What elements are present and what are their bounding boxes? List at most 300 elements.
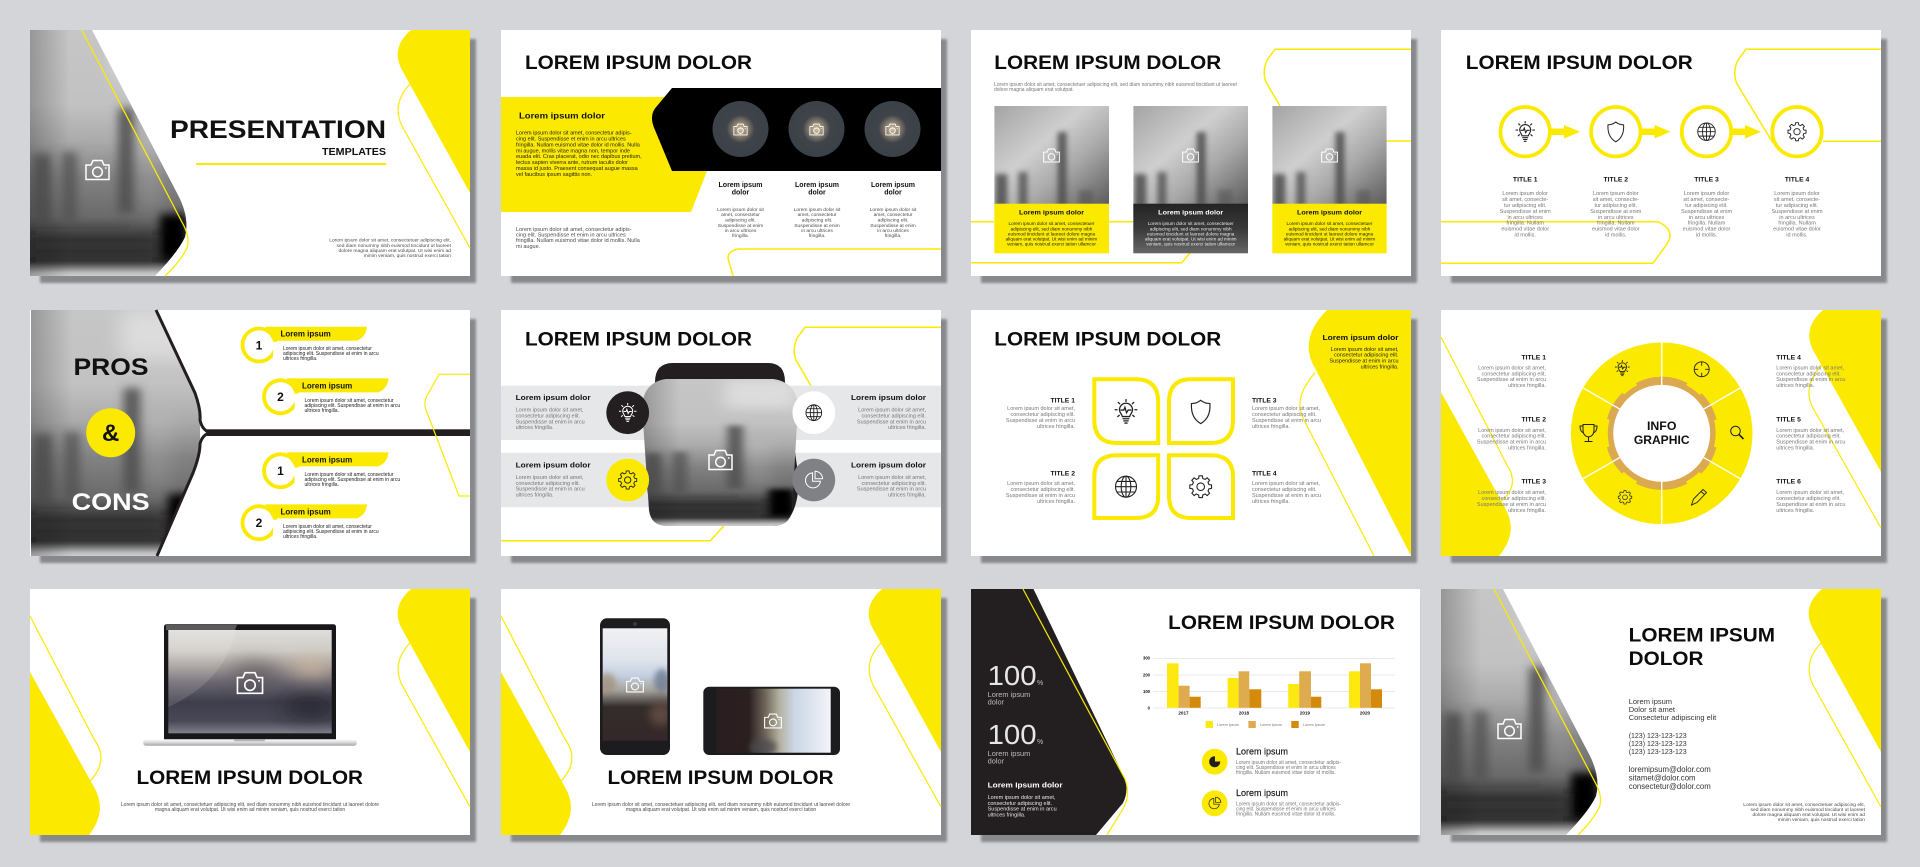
column 1: dolor <box>732 190 750 197</box>
yellow outline right <box>425 374 470 496</box>
column 3: Suspendisse at enim <box>870 223 916 229</box>
item 1 text: fringilla. Nullam euismod vitae dolor id mollis. <box>1236 770 1336 776</box>
item 1 text <box>1236 746 1341 776</box>
camera icons <box>734 124 899 135</box>
left text 2: ultrices fringilla. <box>516 492 554 498</box>
body text: dolore magna aliquam erat volutpat. Ut wisi enim ad <box>1752 812 1865 818</box>
panel: slide 1 presentation cover <box>30 30 470 276</box>
yellow accent line <box>728 249 941 276</box>
icon: camera <box>86 160 109 180</box>
stat 2 <box>988 719 1043 766</box>
left text 2: Lorem ipsum dolor sit amet, <box>516 475 584 481</box>
yellow block text: cing elit. Suspendisse et enim in arcu ultrices <box>516 136 626 142</box>
title 3 text: ultrices fringilla. <box>1252 424 1290 430</box>
item 2 icon <box>1202 790 1228 816</box>
yellow block text: Lorem ipsum dolor sit amet, consectetur adipis- <box>516 130 632 136</box>
step 4 text: euismod vitae dolor <box>1773 227 1821 233</box>
column 3: amet, consectetur <box>874 212 913 218</box>
panel: slide 5 pros and cons <box>30 310 470 556</box>
step 2 text: Suspendisse at enim <box>1590 209 1642 215</box>
panel: slide 6 central photo <box>501 310 941 556</box>
arrows <box>1549 125 1761 138</box>
icon: camera <box>627 678 643 692</box>
address: Dolor sit amet <box>1629 705 1676 714</box>
yellow line left <box>971 221 1133 223</box>
body text: sed diam nonummy nibh euismod tincidunt ut laoreet <box>337 243 452 249</box>
card 3: aliquam erat volutpat. Ut wisi enim ad minim <box>1284 237 1375 242</box>
step 1 text: tur adipiscing elit. <box>1504 203 1547 209</box>
card 3: euismod tincidunt ut laoreet dolore magna <box>1286 232 1374 237</box>
item 1 text: Lorem ipsum dolor sit amet, consectetur adipis- <box>1236 760 1341 766</box>
left text 3: ultrices fringilla. <box>1508 508 1546 514</box>
step 3 text: fringilla. Nullam <box>1688 221 1726 227</box>
left text 1: consectetur adipiscing elit. <box>1481 372 1546 378</box>
step 3 text: Suspendisse at enim <box>1681 209 1732 215</box>
wheel label <box>1634 421 1690 447</box>
left text 1: consectetur adipiscing elit. <box>516 414 581 420</box>
step 2 text: in arcu ultrices <box>1598 215 1634 221</box>
yellow line top <box>1264 49 1411 106</box>
bar chart: 0 <box>1148 705 1151 710</box>
icon: target <box>1694 362 1709 377</box>
left text 1: ultrices fringilla. <box>516 425 554 431</box>
pro item 2: ultrices fringilla. <box>304 408 339 414</box>
card 2: aliquam erat volutpat. Ut wisi enim ad minim <box>1145 237 1237 242</box>
column 2: in arcu ultrices <box>801 228 833 234</box>
divider <box>156 310 210 556</box>
legend: Lorem ipsum <box>1217 723 1239 727</box>
right text 2: Suspendisse at enim in arcu <box>857 486 926 492</box>
left text 1: Lorem ipsum dolor <box>516 393 591 402</box>
column 3: Lorem ipsum dolor sit <box>870 207 917 213</box>
right text 6: consectetur adipiscing elit. <box>1776 496 1841 502</box>
heading: LOREM IPSUM <box>1629 625 1775 647</box>
right text 6 <box>1776 479 1845 514</box>
step 2 text: tur adipiscing elit. <box>1595 203 1638 209</box>
yellow corner right <box>869 589 941 752</box>
photo placeholder <box>30 30 190 276</box>
left text 1: Lorem ipsum dolor sit amet, <box>1478 366 1546 372</box>
thin yellow curve right <box>1809 642 1881 807</box>
step 3 text: euismod vitae dolor <box>1683 227 1731 233</box>
right text 1 <box>851 393 926 431</box>
icon: globe <box>1116 476 1136 497</box>
left text 1: Lorem ipsum dolor sit amet, <box>516 408 584 414</box>
card 2: euismod tincidunt ut laoreet dolore magna <box>1147 232 1235 237</box>
pro item 1: Lorem ipsum dolor sit amet, consectetur <box>283 346 372 352</box>
icon: gear <box>1618 491 1632 504</box>
heading: DOLOR <box>1629 648 1703 670</box>
thin yellow line <box>1300 373 1374 556</box>
ampersand badge: & <box>102 420 119 447</box>
left text 1 <box>516 393 591 431</box>
left text 1: Suspendisse at enim in arcu <box>516 420 585 426</box>
stat 1: % <box>1037 680 1043 687</box>
yellow line lower <box>1441 222 1670 263</box>
lower text: fringilla. Nullam euismod vitae dolor id mollis. Nulla <box>516 238 641 244</box>
item 2 text: Lorem ipsum <box>1236 788 1288 798</box>
card 3: Lorem ipsum dolor <box>1297 210 1362 216</box>
yellow corner left <box>1441 392 1511 556</box>
icon: trophy <box>1580 424 1597 442</box>
badge: globe <box>792 391 835 434</box>
heading: LOREM IPSUM DOLOR <box>525 52 752 74</box>
right text 5: ultrices fringilla. <box>1776 446 1815 452</box>
column 1 <box>717 182 765 239</box>
column 1: fringilla. <box>732 233 749 239</box>
stat 1: 100 <box>988 660 1037 691</box>
grey bands <box>501 386 941 507</box>
left text 3: consectetur adipiscing elit. <box>1481 496 1546 502</box>
step 1 text: in arcu ultrices <box>1507 215 1543 221</box>
wheel label: INFO <box>1647 421 1676 433</box>
lower text: mi augue. <box>516 244 541 250</box>
icon: pencil <box>1692 490 1706 505</box>
con item 2: Lorem ipsum dolor sit amet, consectetur <box>283 524 372 530</box>
card 2: Lorem ipsum dolor <box>1158 210 1224 216</box>
right text 4 <box>1776 354 1845 389</box>
title 1 text: ultrices fringilla. <box>1037 424 1075 430</box>
step 2 text: TITLE 2 <box>1604 176 1628 184</box>
step 1 text <box>1500 176 1551 239</box>
column 2: Suspendisse at enim <box>794 223 840 229</box>
con item 1: Lorem ipsum <box>302 455 352 464</box>
step 4 text: id mollis. <box>1786 233 1808 239</box>
badge: gear <box>606 459 649 501</box>
right text 1: consectetur adipiscing elit. <box>861 414 926 420</box>
column 1: Lorem ipsum dolor sit <box>717 207 765 213</box>
column 3: in arcu ultrices <box>877 228 909 234</box>
heading: LOREM IPSUM DOLOR <box>994 52 1221 74</box>
photo placeholder <box>1441 589 1601 835</box>
stat 1: Lorem ipsum <box>988 690 1030 699</box>
column 2: dolor <box>808 190 826 197</box>
stat 2: % <box>1037 739 1043 746</box>
title 4 text <box>1252 470 1321 505</box>
right text 2 <box>851 460 926 498</box>
item 1 text: Lorem ipsum <box>1236 746 1288 756</box>
left text 2: Suspendisse at enim in arcu <box>516 486 585 492</box>
right text 6: ultrices fringilla. <box>1776 508 1815 514</box>
icon: shield <box>1191 400 1210 424</box>
left text 3: Lorem ipsum dolor sit amet, <box>1478 490 1546 496</box>
step 3 text: tur adipiscing elit. <box>1685 203 1728 209</box>
central photo <box>641 379 798 526</box>
pro item 1 <box>241 327 379 363</box>
lower text: cing elit. Suspendisse et enim in arcu ultrices <box>516 232 626 238</box>
right text 5 <box>1776 417 1845 452</box>
card 3: Lorem ipsum dolor sit amet, consectetuer <box>1287 221 1373 226</box>
right text 5: TITLE 5 <box>1776 417 1801 424</box>
card 2: adipiscing elit, sed diam nonummy nibh <box>1150 226 1232 231</box>
con item 1: Lorem ipsum dolor sit amet, consectetur <box>304 472 394 478</box>
yellow block <box>501 97 707 212</box>
panel: slide 3 photo cards <box>971 30 1411 276</box>
step 1 text: Suspendisse at enim <box>1500 209 1551 215</box>
right text 5: Suspendisse at enim in arcu <box>1776 440 1845 446</box>
pro item 2 <box>262 378 400 415</box>
step 3 text: TITLE 3 <box>1694 176 1719 184</box>
yellow block text: mi augue, mollis vitae magna non, tempor inde <box>516 148 630 154</box>
yellow corner right <box>1809 310 1881 472</box>
right text 5: Lorem ipsum dolor sit amet, <box>1776 428 1845 434</box>
title 4 text: Lorem ipsum dolor sit amet, <box>1252 481 1320 487</box>
icon: camera <box>765 714 781 728</box>
card 3: adipiscing elit, sed diam nonummy nibh <box>1289 226 1371 231</box>
item 2 text: fringilla. Nullam euismod vitae dolor id mollis. <box>1236 812 1336 818</box>
pro item 2: Lorem ipsum dolor sit amet, consectetur <box>304 398 394 404</box>
emails: consectetur@dolor.com <box>1629 782 1711 791</box>
ampersand badge <box>86 408 135 457</box>
card 3: veniam, quis nostrud exerci tation ullamcor <box>1285 242 1374 247</box>
yellow block heading: Lorem ipsum dolor <box>519 112 605 121</box>
column 1: Lorem ipsum <box>719 182 762 189</box>
step 4 text: tur adipiscing elit. <box>1776 203 1819 209</box>
panel: slide 7 four petals <box>971 310 1411 556</box>
right text 2: consectetur adipiscing elit. <box>861 481 926 487</box>
title 2 text: Suspendisse at enim in arcu <box>1006 493 1075 499</box>
title 3 text: Suspendisse at enim in arcu <box>1252 418 1321 424</box>
decorative yellow corner <box>398 30 470 193</box>
dark panel text: Suspendisse at enim in arcu <box>988 807 1057 813</box>
icon: bulb <box>1115 400 1137 423</box>
heading: LOREM IPSUM DOLOR <box>1168 612 1395 634</box>
card 2 <box>1133 106 1248 253</box>
step 2 text <box>1590 176 1642 239</box>
intro text: dolore magna aliquam erat volutpat. <box>994 87 1074 93</box>
body text: Lorem ipsum dolor sit amet, consectetuer adipiscing elit, sed diam nonummy nibh euismod tincidunt ut laoreet dolore <box>121 802 379 808</box>
bar chart: 2017 <box>1178 710 1189 715</box>
panel: slide 2 three photos <box>501 30 941 276</box>
thin line left <box>1441 337 1512 503</box>
title 2 text: TITLE 2 <box>1050 470 1075 477</box>
yellow block text: fringilla. Nullam euismod vitae dolor id mollis. Nulla <box>516 142 641 148</box>
step 2 text: id mollis. <box>1605 233 1627 239</box>
step 3 text <box>1681 176 1732 239</box>
bar chart: 2019 <box>1300 710 1311 715</box>
item 1 text: cing elit. Suspendisse et enim in arcu ultrices <box>1236 765 1336 771</box>
left text 2: ultrices fringilla. <box>1508 446 1546 452</box>
step 2 text: euismod vitae dolor <box>1592 227 1640 233</box>
title: PRESENTATION <box>170 116 386 144</box>
left text 2 <box>516 460 591 498</box>
right text 5: consectetur adipiscing elit. <box>1776 434 1841 440</box>
step 4 text: fringilla. Nullam <box>1778 221 1816 227</box>
stat 1: dolor <box>988 698 1005 707</box>
yellow line <box>1023 589 1128 835</box>
bar chart: 2020 <box>1360 710 1371 715</box>
black frame <box>646 363 799 526</box>
body text: Lorem ipsum dolor sit amet, consectetuer adipiscing elit, <box>329 238 451 244</box>
title 4 text: ultrices fringilla. <box>1252 499 1290 505</box>
pro item 2: 2 <box>277 390 284 404</box>
panel: slide 4 process <box>1441 30 1881 276</box>
pro item 1: ultrices fringilla. <box>283 356 317 362</box>
yellow corner right <box>398 589 470 752</box>
yellow block text: massa id justo. Praesent consequat augue massa <box>516 166 639 172</box>
title 3 text: TITLE 3 <box>1252 398 1277 404</box>
corner text <box>1322 333 1399 371</box>
column 3 <box>870 182 917 239</box>
bar chart: 2018 <box>1239 710 1250 715</box>
right text 6: TITLE 6 <box>1776 479 1801 486</box>
step 1 text: TITLE 1 <box>1513 176 1538 184</box>
title 1 text: Suspendisse at enim in arcu <box>1006 418 1075 424</box>
panel: slide 9 laptop <box>30 589 470 835</box>
column 2: Lorem ipsum <box>795 182 839 189</box>
panel: slide 12 contact <box>1441 589 1881 835</box>
left text 2: Lorem ipsum dolor <box>516 460 591 469</box>
petals <box>1094 379 1233 518</box>
photo circles <box>712 101 920 157</box>
heading: LOREM IPSUM DOLOR <box>994 329 1221 351</box>
panel: slide 10 phone and tablet <box>501 589 941 835</box>
left text 1: TITLE 1 <box>1521 354 1546 361</box>
item 1 icon <box>1202 749 1228 775</box>
column 2: fringilla. <box>809 233 825 239</box>
right text 4: TITLE 4 <box>1776 354 1801 361</box>
card 2: Lorem ipsum dolor sit amet, consectetuer <box>1148 221 1234 226</box>
laptop <box>143 624 357 746</box>
body text: magna aliquam erat volutpat. Ut wisi enim ad minim veniam, quis nostrud exerci tation <box>155 807 345 813</box>
thin yellow curve right <box>398 83 470 248</box>
step 4 text: sit amet, consecte- <box>1774 197 1820 203</box>
badge: bulb <box>606 391 649 434</box>
title 3 text: Lorem ipsum dolor sit amet, <box>1252 406 1320 412</box>
icon: camera <box>237 673 263 693</box>
dark panel text: Lorem ipsum dolor sit amet, <box>988 795 1056 801</box>
phone numbers: (123) 123-123-123 <box>1629 733 1687 740</box>
column 1: adipiscing elit. <box>725 218 756 224</box>
con item 2: 2 <box>256 516 263 530</box>
left text 2: Suspendisse at enim in arcu <box>1477 440 1546 446</box>
stat 1 <box>988 660 1043 707</box>
pro item 1: 1 <box>256 338 263 352</box>
right text 1: ultrices fringilla. <box>888 425 926 431</box>
legend: Lorem ipsum <box>1260 723 1282 727</box>
thin line right <box>398 642 470 807</box>
step 3 text: Lorem ipsum dolor <box>1684 191 1729 197</box>
step 3 text: id mollis. <box>1696 233 1718 239</box>
body text: minim veniam, quis nostrud exerci tation <box>364 253 451 259</box>
thin line right <box>869 642 941 807</box>
title 1 text: consectetur adipiscing elit. <box>1010 412 1075 418</box>
step 2 text: sit amet, consecte- <box>1593 197 1639 203</box>
title 1 text <box>1006 398 1075 430</box>
column 2 <box>794 182 841 239</box>
icon: globe <box>1698 123 1715 140</box>
right text 4: consectetur adipiscing elit. <box>1776 372 1841 378</box>
right text 2: Lorem ipsum dolor <box>851 460 926 469</box>
right text 1: Lorem ipsum dolor sit amet, <box>858 408 926 414</box>
step 3 text: in arcu ultrices <box>1689 215 1724 221</box>
step 3 text: sit amet, consecte- <box>1683 197 1730 203</box>
column 1: in arcu ultrices <box>725 228 757 234</box>
heading: LOREM IPSUM DOLOR <box>1466 52 1693 74</box>
heading: LOREM IPSUM DOLOR <box>136 767 363 789</box>
dark panel text: Lorem Ipsum dolor <box>988 781 1063 790</box>
right text 6: Suspendisse at enim in arcu <box>1776 502 1845 508</box>
title 2 text: Lorem ipsum dolor sit amet, <box>1007 481 1075 487</box>
column 1: Suspendisse at enim <box>718 223 763 229</box>
step 1 text: fringilla. Nullam <box>1506 221 1544 227</box>
bar chart <box>1143 656 1395 715</box>
yellow block text: vel faucibus ipsum sagittis non. <box>516 172 593 178</box>
card 1: veniam, quis nostrud exerci tation ullamcor <box>1007 242 1096 247</box>
heading: LOREM IPSUM DOLOR <box>608 767 834 789</box>
step 4 text: Suspendisse at enim <box>1771 209 1823 215</box>
phone numbers: (123) 123-123-123 <box>1629 749 1687 756</box>
yellow line bottom <box>971 253 1190 263</box>
left text 1: Suspendisse at enim in arcu <box>1477 377 1546 383</box>
black band <box>652 88 941 171</box>
item 2 text <box>1236 788 1341 818</box>
column 3: Lorem ipsum <box>871 182 915 189</box>
bar chart: 300 <box>1143 656 1151 660</box>
label: pros: PROS <box>74 354 148 381</box>
card 1: euismod tincidunt ut laoreet dolore magna <box>1008 232 1096 237</box>
thin yellow curve left <box>1494 589 1600 835</box>
yellow corner <box>1309 310 1411 556</box>
left text 3: TITLE 3 <box>1521 479 1546 486</box>
body text: minim veniam, quis nostrud exerci tation <box>1778 817 1865 823</box>
left text 3 <box>1477 479 1546 514</box>
wheel <box>1571 342 1752 524</box>
corner text: ultrices fringilla. <box>1361 365 1399 371</box>
title 4 text: Suspendisse at enim in arcu <box>1252 493 1321 499</box>
left text 1: ultrices fringilla. <box>1508 383 1546 389</box>
tablet <box>703 687 840 755</box>
yellow block text: lectus sapien viverra ante, rutrum iaculis dolor <box>516 160 628 166</box>
column 2: amet, consectetur <box>798 212 837 218</box>
icon: shield <box>1608 122 1624 142</box>
icon: camera <box>709 450 732 470</box>
right text 6: Lorem ipsum dolor sit amet, <box>1776 490 1845 496</box>
wheel label: GRAPHIC <box>1634 435 1690 447</box>
pro item 1: adipiscing elit. Suspendisse at enim in arcu <box>283 351 379 357</box>
legend: Lorem ipsum <box>1303 723 1325 727</box>
con item 2 <box>241 504 379 541</box>
con item 1: 1 <box>277 464 284 478</box>
title 1 text: Lorem ipsum dolor sit amet, <box>1007 406 1075 412</box>
dark panel text: ultrices fringilla. <box>988 812 1026 818</box>
emails: sitamet@dolor.com <box>1629 774 1696 782</box>
yellow line top <box>794 327 941 386</box>
dark panel text <box>988 781 1063 818</box>
phone <box>598 618 673 755</box>
corner text: Lorem ipsum dolor <box>1322 333 1399 342</box>
divider bar <box>207 429 470 436</box>
left text 2: consectetur adipiscing elit. <box>1481 434 1546 440</box>
left text 3: Suspendisse at enim in arcu <box>1477 502 1546 508</box>
column 1: amet, consectetur <box>721 212 760 218</box>
emails: loremipsum@dolor.com <box>1629 765 1711 774</box>
title 4 text: consectetur adipiscing elit. <box>1252 487 1317 493</box>
step 2 text: Lorem ipsum dolor <box>1593 191 1639 197</box>
step 1 text: id mollis. <box>1514 233 1536 239</box>
con item 2: adipiscing elit. Suspendisse at enim in arcu <box>283 529 379 535</box>
left text 2: Lorem ipsum dolor sit amet, <box>1478 428 1546 434</box>
right text 2: Lorem ipsum dolor sit amet, <box>858 475 926 481</box>
thin line right <box>1809 365 1881 528</box>
thin yellow curve left <box>82 30 188 276</box>
body text: magna aliquam erat volutpat. Ut wisi enim ad minim veniam, quis nostrud exerci tation <box>626 807 816 813</box>
dark panel text: consectetur adipiscing elit. <box>988 801 1053 807</box>
title 3 text: consectetur adipiscing elit. <box>1252 412 1317 418</box>
left text 1 <box>1477 354 1546 389</box>
left text 2 <box>1477 417 1546 452</box>
card 1: Lorem ipsum dolor sit amet, consectetuer <box>1009 221 1095 226</box>
